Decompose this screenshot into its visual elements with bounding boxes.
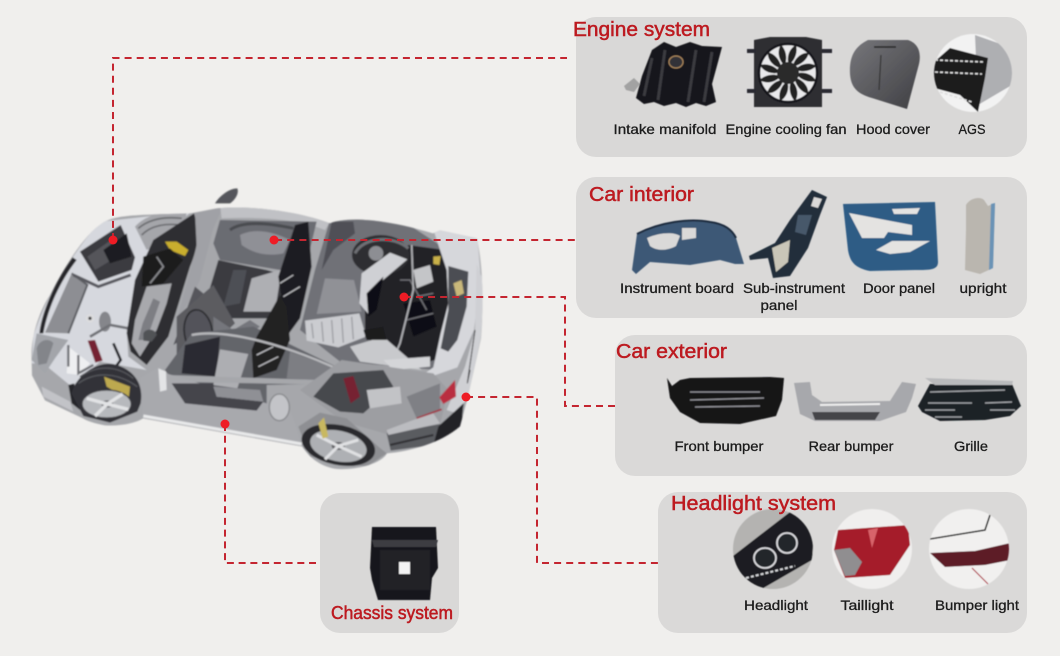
icon: instrument board xyxy=(632,220,744,274)
marker: headlight point xyxy=(462,392,470,402)
connector: headlight system xyxy=(466,397,658,563)
label: intake manifold: Intake manifold xyxy=(614,121,716,137)
icon: bumper light photo xyxy=(929,509,1010,589)
label: headlight: Headlight xyxy=(744,597,808,613)
marker: interior point xyxy=(270,236,278,244)
marker: engine point xyxy=(108,236,118,244)
icon: headlight photo xyxy=(733,509,815,590)
tyre lines behind hood xyxy=(135,213,187,250)
front left wheel xyxy=(72,364,141,423)
rear cabin and trunk area xyxy=(300,216,445,370)
label: instrument board: Instrument board xyxy=(620,280,734,296)
far door panel xyxy=(213,220,317,270)
dash and steering wheel xyxy=(176,285,236,354)
panel: car interior xyxy=(576,177,1027,318)
near cabin floor xyxy=(164,326,334,404)
marker: exterior point xyxy=(400,292,408,302)
label: engine cooling fan: Engine cooling fan xyxy=(726,121,846,137)
panel: engine system xyxy=(576,17,1027,157)
icon: intake manifold xyxy=(624,42,722,107)
heading: headlight system: Headlight system xyxy=(671,492,836,515)
rear left wheel xyxy=(298,417,379,472)
icon: upright xyxy=(965,198,995,274)
rear hatch xyxy=(426,230,481,376)
icon: sub-instrument panel xyxy=(749,190,827,278)
icon: door panel xyxy=(843,202,938,271)
icon: front bumper xyxy=(667,377,784,424)
connector: car interior xyxy=(275,239,575,241)
heading: car exterior: Car exterior xyxy=(616,340,727,363)
icon: taillight photo xyxy=(832,509,912,589)
icon: AGS xyxy=(934,34,1012,112)
label: sub-instrument panel second line: panel xyxy=(760,297,798,313)
front right wheel arch xyxy=(127,213,198,365)
muffler xyxy=(305,313,366,347)
icon: grille xyxy=(918,378,1021,421)
label: taillight: Taillight xyxy=(840,597,894,613)
label: upright: upright xyxy=(960,280,1007,296)
car cutaway illustration xyxy=(31,188,484,472)
icon: rear bumper xyxy=(794,382,916,421)
label: bumper light: Bumper light xyxy=(935,597,1019,613)
label: sub-instrument panel: Sub-instrument xyxy=(743,280,845,296)
connector: engine system xyxy=(113,58,567,240)
heading: chassis system: Chassis system xyxy=(331,603,453,623)
mirror xyxy=(215,188,238,203)
heading: engine system: Engine system xyxy=(573,18,710,41)
far seat and floor xyxy=(210,260,282,320)
panel: chassis system xyxy=(320,493,459,633)
label: front bumper: Front bumper xyxy=(674,438,764,454)
side sill and door xyxy=(166,372,268,419)
body silhouette xyxy=(31,207,482,469)
connector: chassis system xyxy=(225,424,316,563)
label: grille: Grille xyxy=(954,438,988,454)
front trunk box xyxy=(80,225,135,282)
radiator panel xyxy=(45,273,87,333)
label: AGS: AGS xyxy=(958,121,986,137)
label: rear bumper: Rear bumper xyxy=(808,438,894,454)
icon: chassis guard plate xyxy=(370,527,438,600)
rear mechanicals xyxy=(300,360,448,435)
marker: chassis point xyxy=(220,420,230,428)
icon: engine cooling fan xyxy=(747,37,832,107)
label: hood cover: Hood cover xyxy=(856,121,930,137)
icon: hood cover xyxy=(850,40,920,109)
heading: car interior: Car interior xyxy=(589,183,694,206)
front bumper glass xyxy=(31,333,68,368)
roof xyxy=(220,207,329,230)
rear fender and bumper xyxy=(298,413,387,467)
engine bay xyxy=(365,245,450,368)
front suspension xyxy=(99,312,111,332)
hood xyxy=(32,212,192,387)
panel: headlight system xyxy=(658,492,1027,633)
label: door panel: Door panel xyxy=(863,280,935,296)
A pillar xyxy=(194,208,220,244)
panel: car exterior xyxy=(615,335,1027,476)
connector: car exterior xyxy=(404,297,615,406)
